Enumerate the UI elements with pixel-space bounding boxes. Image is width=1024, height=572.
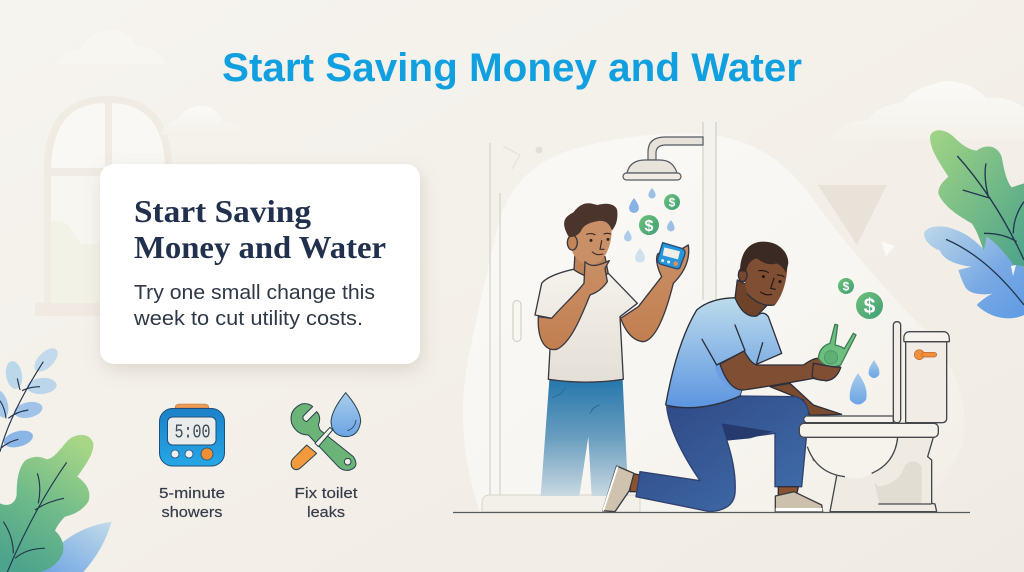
right arm with hand xyxy=(621,245,689,342)
leaves: top right xyxy=(924,130,1024,318)
card body text: week to cut utility costs. xyxy=(133,308,363,330)
blue leaf xyxy=(40,522,112,572)
near arm xyxy=(720,351,841,390)
base xyxy=(808,437,937,512)
panel: intro card xyxy=(100,164,420,364)
window illustration xyxy=(35,96,172,316)
shirt xyxy=(666,298,782,408)
timer in hand xyxy=(658,243,685,269)
wrench xyxy=(291,404,356,470)
neck xyxy=(574,253,608,276)
hair xyxy=(564,203,617,237)
person standing with timer xyxy=(535,203,689,496)
far arm xyxy=(770,383,842,415)
toilet xyxy=(799,322,949,512)
face xyxy=(569,219,612,265)
label: fix toilet leaks: Fix toilet xyxy=(294,485,358,502)
shower enclosure xyxy=(482,122,716,512)
t-shirt xyxy=(535,269,637,382)
icon: timer: 5:00 xyxy=(174,422,210,444)
card body text: Try one small change this xyxy=(134,282,375,304)
triangle decoration xyxy=(818,185,887,245)
leaves: bottom left xyxy=(0,344,112,572)
floor line xyxy=(453,512,970,514)
left arm with hand xyxy=(538,261,609,350)
icon: wrench, screwdriver and drop xyxy=(291,393,361,470)
card heading: Money and Water xyxy=(134,229,386,265)
screwdriver xyxy=(315,427,333,447)
person kneeling at toilet xyxy=(603,242,856,512)
coin large: $ xyxy=(864,295,876,318)
icon: timer xyxy=(160,404,224,466)
pants xyxy=(636,396,809,512)
cloud: top left xyxy=(56,30,166,64)
face xyxy=(744,257,787,306)
jeans xyxy=(541,380,628,496)
label: fix toilet leaks: leaks xyxy=(307,504,345,521)
shower head xyxy=(623,137,703,180)
back foot xyxy=(630,473,640,492)
bottle xyxy=(818,324,856,367)
card heading xyxy=(134,193,386,265)
card heading: Start Saving xyxy=(134,193,311,229)
label: 5-minute showers xyxy=(159,485,225,521)
bowl xyxy=(807,437,898,479)
background blob xyxy=(463,133,965,512)
label: 5-minute showers: showers xyxy=(162,504,222,521)
card body text xyxy=(133,282,375,330)
water drops and coins: toilet xyxy=(838,278,883,404)
tank xyxy=(906,342,947,423)
title: Start Saving Money and Water xyxy=(222,46,802,90)
label: 5-minute showers: 5-minute xyxy=(159,485,225,502)
blue leaf xyxy=(924,226,1024,318)
hair xyxy=(740,242,788,273)
coin small: $ xyxy=(669,196,676,210)
drop xyxy=(331,393,361,437)
branch xyxy=(0,344,62,452)
seat xyxy=(804,416,893,423)
green leaf xyxy=(930,130,1024,267)
water drops and coins: shower xyxy=(624,188,680,262)
coin small: $ xyxy=(843,280,850,294)
handle xyxy=(914,350,937,360)
hand on bottle xyxy=(812,363,841,381)
cloud: top right xyxy=(829,81,1024,140)
front foot xyxy=(778,487,798,497)
cloud: behind window xyxy=(160,106,246,135)
neck xyxy=(735,280,768,316)
green leaf xyxy=(0,435,93,572)
coin large: $ xyxy=(645,218,654,235)
label: fix toilet leaks xyxy=(294,485,358,521)
